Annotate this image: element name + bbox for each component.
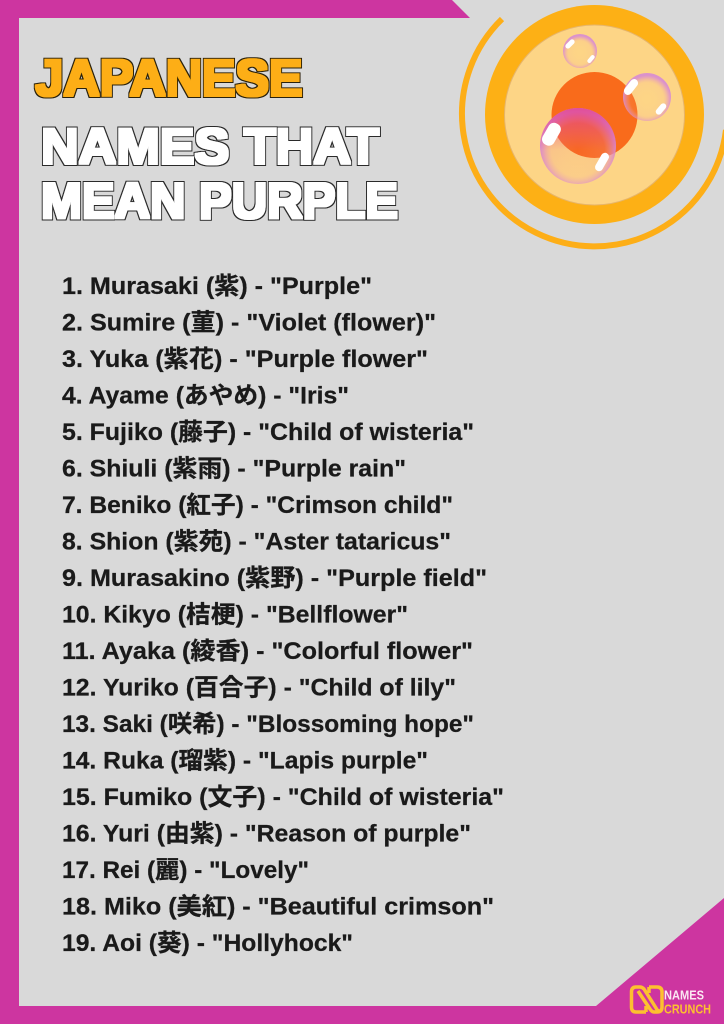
list of names: 9. Murasakino (紫野) - "Purple field" bbox=[62, 565, 487, 592]
orange ring bbox=[485, 5, 704, 224]
bubble: small bbox=[563, 34, 597, 68]
list of names: 5. Fujiko (藤子) - "Child of wisteria" bbox=[62, 419, 474, 446]
list of names: 4. Ayame (あやめ) - "Iris" bbox=[62, 382, 349, 410]
heading: mean purple: MEAN PURPLE bbox=[41, 173, 398, 229]
list of names: 16. Yuri (由紫) - "Reason of purple" bbox=[62, 820, 471, 848]
heading: names that: NAMES THAT bbox=[41, 118, 379, 174]
logo text: NAMES bbox=[664, 988, 704, 1002]
logo: Names Crunch bbox=[632, 987, 711, 1016]
icon: orange circle with bubbles bbox=[462, 5, 724, 246]
list of names bbox=[62, 273, 504, 957]
list of names: 15. Fumiko (文子) - "Child of wisteria" bbox=[62, 784, 504, 811]
list of names: 1. Murasaki (紫) - "Purple" bbox=[62, 273, 372, 300]
bubble: large bbox=[540, 108, 616, 184]
logo mark bbox=[632, 987, 662, 1012]
list of names: 13. Saki (咲希) - "Blossoming hope" bbox=[62, 711, 474, 738]
list of names: 8. Shion (紫苑) - "Aster tataricus" bbox=[62, 528, 451, 556]
list of names: 12. Yuriko (百合子) - "Child of lily" bbox=[62, 674, 456, 702]
list of names: 7. Beniko (紅子) - "Crimson child" bbox=[62, 492, 453, 519]
outer arc bbox=[462, 19, 724, 246]
title bbox=[36, 50, 398, 229]
heading: Japanese: JAPANESE bbox=[36, 50, 302, 106]
list of names: 19. Aoi (葵) - "Hollyhock" bbox=[62, 930, 353, 957]
list of names: 2. Sumire (菫) - "Violet (flower)" bbox=[62, 310, 436, 336]
list of names: 10. Kikyo (桔梗) - "Bellflower" bbox=[62, 602, 408, 628]
inner disc bbox=[504, 25, 684, 205]
centre disc bbox=[552, 72, 638, 158]
list of names: 11. Ayaka (綾香) - "Colorful flower" bbox=[62, 638, 473, 665]
bubble: right bbox=[622, 73, 671, 121]
list of names: 6. Shiuli (紫雨) - "Purple rain" bbox=[62, 456, 406, 482]
list of names: 18. Miko (美紅) - "Beautiful crimson" bbox=[62, 894, 494, 920]
logo: Names Crunch: CRUNCH bbox=[664, 1002, 711, 1016]
list of names: 17. Rei (麗) - "Lovely" bbox=[62, 857, 309, 884]
list of names: 3. Yuka (紫花) - "Purple flower" bbox=[62, 346, 428, 373]
list of names: 14. Ruka (瑠紫) - "Lapis purple" bbox=[62, 748, 428, 774]
